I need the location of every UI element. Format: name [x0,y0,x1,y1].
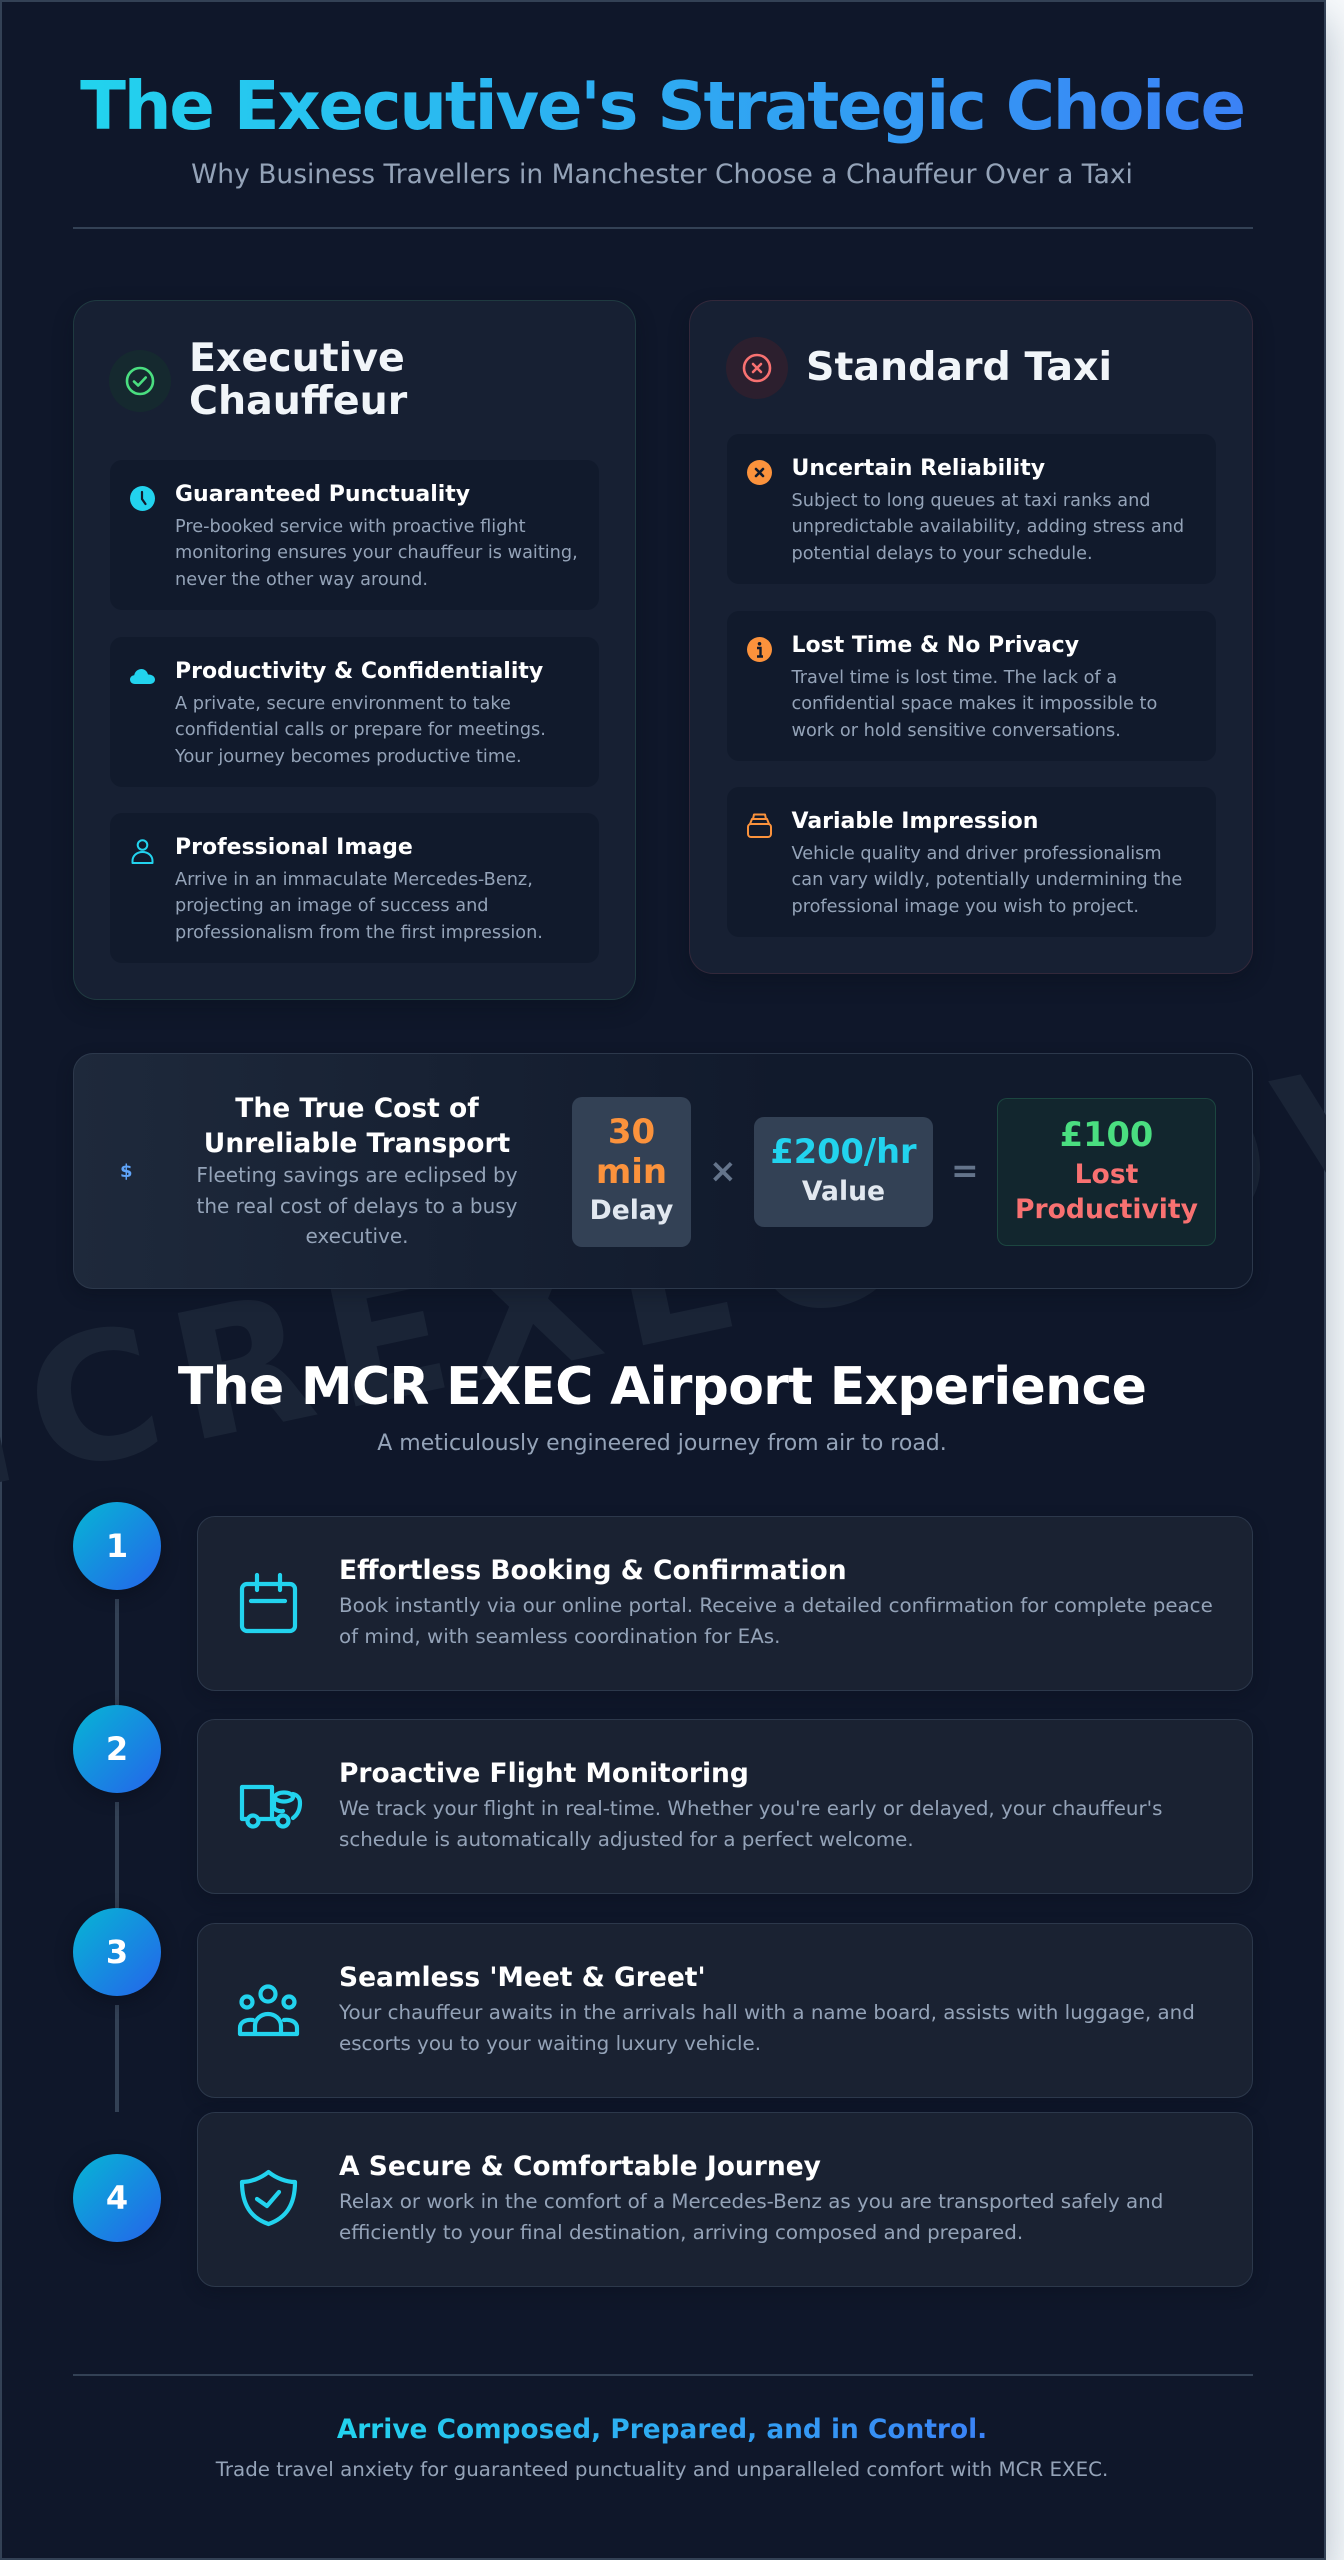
item title: Guaranteed Punctuality [175,482,470,507]
icon: info circle [747,637,772,662]
item description: Subject to long queues at taxi ranks and [792,491,1151,511]
section subtitle: A meticulously engineered journey from air to road. [377,1431,947,1456]
step description [339,1797,1162,1851]
item description [791,668,1157,740]
step description [339,2190,1163,2244]
item description: Travel time is lost time. The lack of a [792,668,1117,688]
band heading [204,1093,510,1159]
equation box: delay: min [596,1152,667,1192]
item: professional image [110,813,599,963]
panel: true cost band [73,1053,1253,1289]
heading: standard taxi: Standard Taxi [806,344,1112,390]
step 3 number [73,1908,161,1996]
icon: x circle [747,460,772,485]
subtitle: Why Business Travellers in Manchester Choose a Chauffeur Over a Taxi [191,159,1133,190]
equation box: lost productivity: Lost [1075,1159,1138,1190]
item description: Pre-booked service with proactive flight [175,517,526,537]
step description: escorts you to your waiting luxury vehicle. [339,2032,761,2055]
section heading: The MCR EXEC Airport Experience [178,1357,1146,1417]
icon: cloud [130,669,155,684]
step 2 card [197,1719,1253,1894]
operator: equals: = [951,1151,979,1190]
band description: Fleeting savings are eclipsed by [196,1163,518,1187]
icon: check badge [109,350,171,412]
equation box: value [754,1117,933,1227]
step title: Proactive Flight Monitoring [339,1758,749,1789]
step 4 card [197,2112,1253,2287]
band heading: The True Cost of [235,1093,479,1124]
item: lost time and no privacy [726,611,1216,761]
item description: Your journey becomes productive time. [175,746,522,766]
title: The Executive's Strategic Choice [80,67,1244,145]
step 1 number [73,1502,161,1590]
band description: executive. [305,1224,409,1248]
equation box: delay [572,1097,691,1247]
icon: dollar: $ [120,1161,133,1182]
item description: can vary wildly, potentially undermining the [792,870,1182,890]
equation box: lost productivity [997,1098,1216,1246]
icon: calendar [240,1572,298,1634]
item description: A private, secure environment to take [175,694,511,714]
step description [339,2001,1195,2055]
step description: of mind, with seamless coordination for EAs. [339,1625,780,1648]
item title: Lost Time & No Privacy [792,633,1079,658]
icon: archive box [747,814,772,838]
equation box: value: £200/hr [770,1132,917,1171]
equation box: lost productivity: Productivity [1015,1194,1198,1225]
icon: person [132,839,154,864]
equation box: lost productivity: £100 [1060,1115,1153,1154]
item description: unpredictable availability, adding stress and [792,517,1184,537]
step 3 number: 3 [106,1933,128,1971]
step 4 number [73,2154,161,2242]
item description [175,694,546,766]
step 1 card [197,1516,1253,1691]
item: guaranteed punctuality [110,460,599,610]
panel: standard taxi [689,300,1253,974]
step description: Relax or work in the comfort of a Mercedes-Benz as you are transported safely and [339,2190,1163,2213]
step description [339,1594,1213,1648]
item description [175,870,543,942]
step 2 number: 2 [106,1730,128,1768]
item title: Variable Impression [792,809,1038,834]
step description: efficiently to your final destination, arriving composed and prepared. [339,2221,1023,2244]
item title: Professional Image [175,835,413,860]
step title: Seamless 'Meet & Greet' [339,1962,706,1993]
step description: Your chauffeur awaits in the arrivals hall with a name board, assists with luggage, and [339,2001,1195,2024]
item title: Uncertain Reliability [792,456,1045,481]
footer headline: Arrive Composed, Prepared, and in Control. [337,2414,987,2445]
heading: executive chauffeur: Executive [189,335,405,381]
icon: people [238,1984,300,2036]
item description: Vehicle quality and driver professionalism [792,844,1162,864]
heading: executive chauffeur: Chauffeur [189,378,407,424]
step description: Book instantly via our online portal. Receive a detailed confirmation for complete peace [339,1594,1213,1617]
item: variable impression [726,787,1216,937]
item description: projecting an image of success and [175,896,489,916]
item description: work or hold sensitive conversations. [792,720,1121,740]
equation box: delay: 30 [608,1112,655,1152]
icon: clock [130,486,155,511]
operator: times: × [709,1151,737,1190]
footer text: Trade travel anxiety for guaranteed punctuality and unparalleled comfort with MCR EXEC. [216,2458,1108,2481]
item description: Arrive in an immaculate Mercedes-Benz, [175,870,533,890]
band heading: Unreliable Transport [204,1128,510,1159]
item description: confidential calls or prepare for meetings. [175,720,546,740]
equation box: value: Value [802,1176,885,1207]
item: uncertain reliability [726,434,1216,584]
step 1 number: 1 [106,1527,128,1565]
item description [792,491,1184,564]
icon: shield check [240,2170,298,2226]
step 4 number: 4 [106,2179,128,2217]
step description: schedule is automatically adjusted for a perfect welcome. [339,1828,914,1851]
item description: potential delays to your schedule. [792,544,1093,564]
item: productivity and confidentiality [110,637,599,787]
item description: never the other way around. [175,570,428,590]
step title: Effortless Booking & Confirmation [339,1555,847,1586]
item description: monitoring ensures your chauffeur is waiting, [175,543,578,563]
step 2 number [73,1705,161,1793]
heading: executive chauffeur [189,335,408,424]
step title: A Secure & Comfortable Journey [339,2151,821,2182]
item description: professional image you wish to project. [792,896,1139,916]
icon: cross badge [726,337,788,399]
item description [175,517,578,590]
step description: We track your flight in real-time. Whether you're early or delayed, your chauffeur's [339,1797,1162,1820]
step 3 card [197,1923,1253,2098]
item description: confidential space makes it impossible to [792,694,1157,714]
equation box: delay: Delay [590,1195,673,1226]
item description [792,844,1182,916]
panel: executive chauffeur [73,300,636,1000]
item description: professionalism from the first impression. [175,922,543,942]
band description [196,1163,518,1248]
icon: vehicle tracking [240,1784,302,1829]
band description: the real cost of delays to a busy [196,1194,518,1218]
item title: Productivity & Confidentiality [175,659,543,684]
